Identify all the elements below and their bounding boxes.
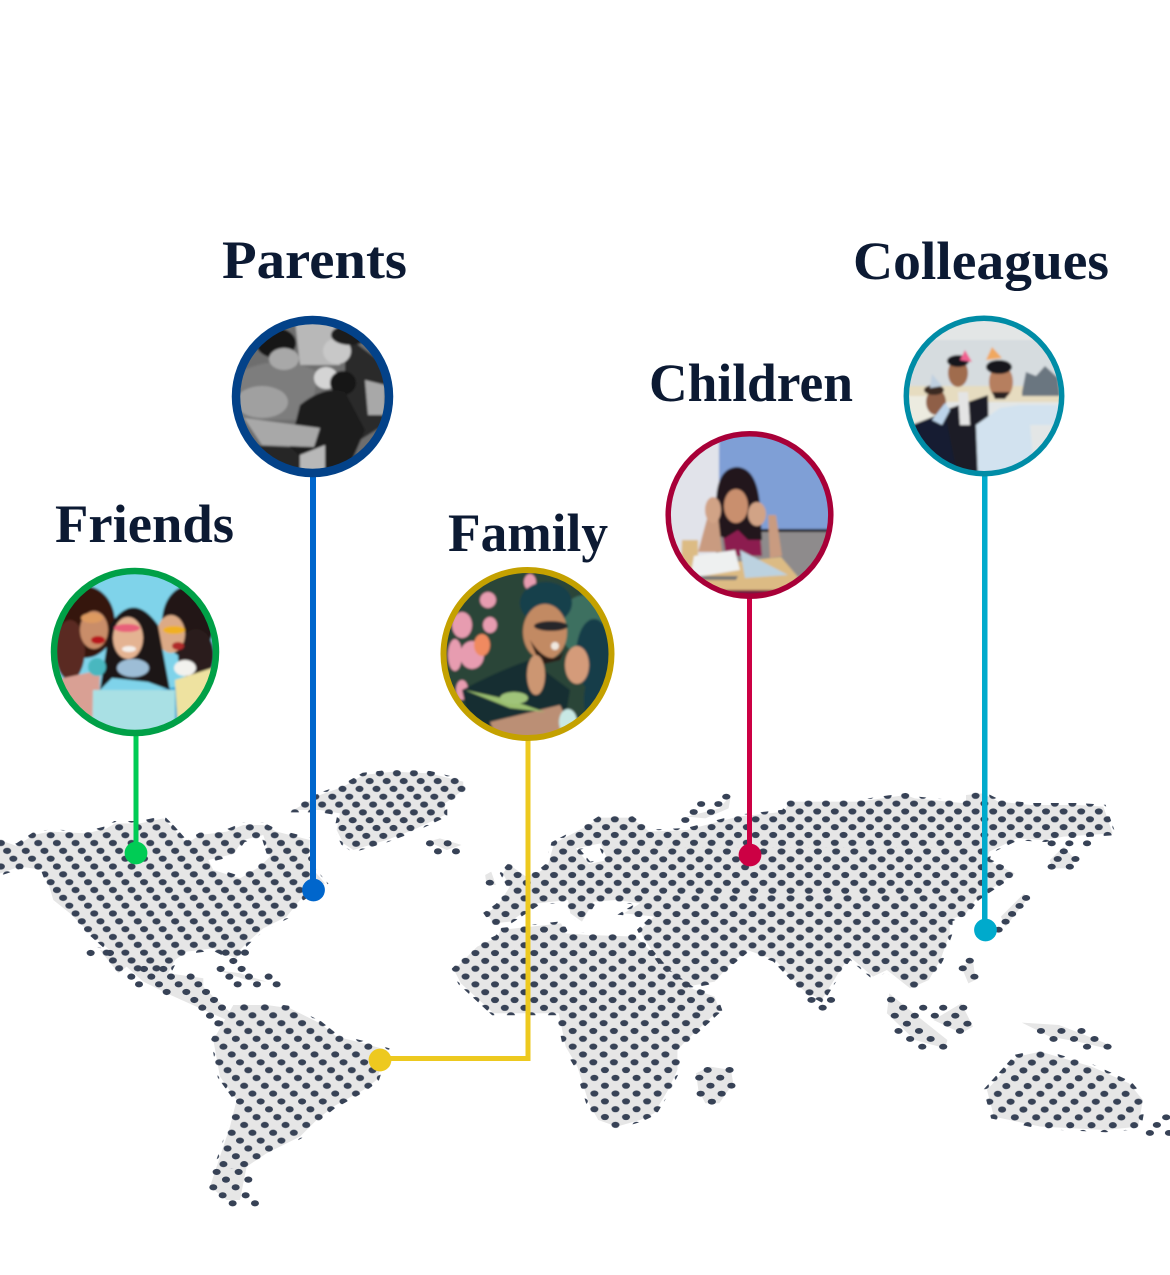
- location dot: Parents: [302, 879, 325, 901]
- photo ring: Friends: [54, 571, 216, 733]
- label: Friends: Friends: [55, 494, 234, 554]
- world map: [0, 760, 1170, 1206]
- label: Children: Children: [649, 353, 853, 413]
- pin: Family: [369, 567, 615, 1071]
- map: South America dots: [211, 1004, 390, 1169]
- connector line: Children: [747, 595, 752, 855]
- photo ring: Colleagues: [906, 318, 1062, 474]
- location dot: Children: [739, 844, 761, 866]
- map: Eurasia dots: [483, 792, 1114, 1002]
- map: Greenland dots: [290, 770, 466, 851]
- connector line: Parents: [310, 470, 316, 890]
- photo: parents and child with laptop: [240, 324, 385, 469]
- pin: Parents: [232, 316, 393, 901]
- map: Africa dots: [452, 922, 722, 1128]
- photo ring: Family: [444, 570, 612, 738]
- photo: girl at school desk: [671, 436, 828, 594]
- photo: smiling couple: [446, 573, 608, 735]
- pin: Friends: [50, 565, 220, 864]
- connector line: Friends: [134, 730, 138, 853]
- photo ring: Children: [668, 434, 831, 596]
- location dot: Friends: [125, 842, 147, 864]
- photo ring: Parents: [236, 320, 389, 473]
- label: Parents: Parents: [222, 230, 407, 290]
- photo: three friends laughing: [57, 574, 213, 730]
- location dot: Family: [369, 1049, 391, 1071]
- map: land shapes: [0, 772, 1143, 1200]
- pin: Colleagues: [903, 316, 1065, 941]
- label: Colleagues: Colleagues: [853, 231, 1109, 291]
- map: Australia dots: [984, 1051, 1144, 1132]
- location dot: Colleagues: [974, 919, 997, 941]
- map: island dots east: [486, 794, 1170, 1136]
- map: island dots west: [87, 840, 460, 1206]
- map: North America dots: [0, 818, 328, 973]
- photo: colleagues at office party: [909, 321, 1059, 471]
- connector line: Family: [380, 735, 528, 1058]
- connector line: Colleagues: [982, 472, 988, 930]
- pin: Children: [666, 431, 834, 866]
- label: Family: Family: [448, 503, 608, 563]
